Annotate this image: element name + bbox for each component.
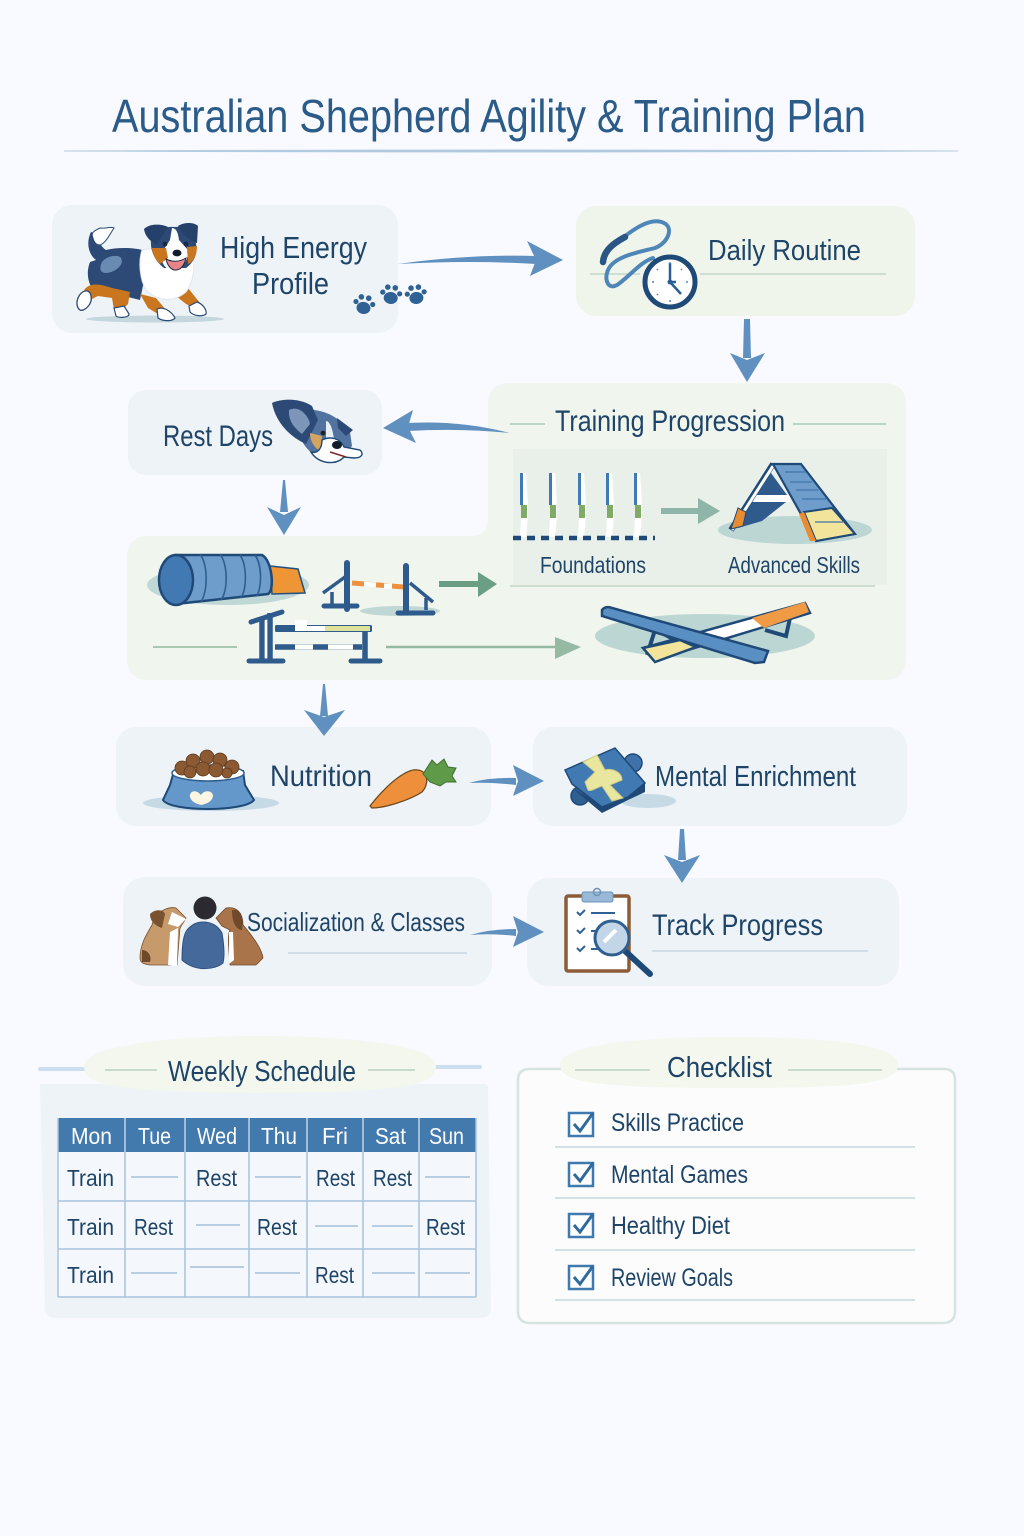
icon: food bowl <box>143 750 279 811</box>
heading: weekly schedule <box>84 1036 436 1093</box>
icon: carrot <box>370 759 456 808</box>
schedule table: Rest <box>316 1165 355 1191</box>
icon: seesaw <box>595 602 815 663</box>
checklist item: healthy diet: Healthy Diet <box>611 1212 730 1240</box>
schedule table: Train <box>67 1214 114 1240</box>
schedule table: Rest <box>373 1165 412 1191</box>
icon: puzzle pieces <box>565 748 645 813</box>
heading: checklist: Checklist <box>667 1052 772 1084</box>
panel: rest days <box>128 390 382 475</box>
icon: person with two dogs <box>140 896 263 969</box>
arrow: training progression to rest days <box>383 410 510 443</box>
panel: high energy profile <box>52 205 428 333</box>
panel: training progression <box>127 383 906 680</box>
arrow: foundations to advanced skills <box>661 498 720 524</box>
label: foundations: Foundations <box>540 552 646 578</box>
arrow: high energy to daily routine <box>398 241 563 276</box>
heading: mental enrichment: Mental Enrichment <box>655 761 856 793</box>
icon: a-frame <box>718 464 872 544</box>
schedule table: Rest <box>196 1165 238 1191</box>
heading: track progress: Track Progress <box>652 909 823 942</box>
icon: running dog <box>77 223 224 322</box>
schedule table: Sat <box>375 1123 407 1149</box>
divider line: left of panel jump <box>153 646 237 648</box>
heading: training progression: Training Progression <box>555 405 785 438</box>
schedule table: Rest <box>315 1262 354 1288</box>
schedule table: Mon <box>71 1123 112 1149</box>
dog legs <box>84 284 130 310</box>
heading: high energy profile: Profile <box>252 266 329 301</box>
icon: weave poles <box>513 473 655 538</box>
checklist item: review goals <box>555 1264 915 1300</box>
label: advanced skills: Advanced Skills <box>728 552 860 578</box>
checklist item: skills practice <box>555 1109 915 1147</box>
arrow: panel jump to seesaw <box>386 637 581 659</box>
schedule table: Fri <box>322 1123 348 1149</box>
arrow: socialization to track progress <box>470 916 544 947</box>
icon: paw prints <box>352 283 428 316</box>
schedule table: Rest <box>134 1214 173 1240</box>
heading: socialization and classes: Socialization & Classes <box>247 907 465 937</box>
schedule table: Sun <box>429 1123 464 1149</box>
schedule table: Rest <box>426 1214 465 1240</box>
arrow: nutrition to mental enrichment <box>469 765 544 796</box>
arrow: agility to nutrition <box>304 684 345 736</box>
heading: weekly schedule: Weekly Schedule <box>168 1056 356 1088</box>
checklist item: mental games: Mental Games <box>611 1161 748 1189</box>
arrow: mental enrichment to track progress <box>664 829 700 883</box>
schedule table: Train <box>67 1262 114 1288</box>
icon: panel jump <box>249 612 380 661</box>
icon: bar jump <box>323 563 440 616</box>
heading: high energy profile <box>220 230 367 301</box>
schedule table: Thu <box>261 1123 297 1149</box>
panel: weekly schedule <box>40 1036 491 1318</box>
panel: checklist <box>518 1037 955 1323</box>
icon: tunnel <box>147 554 309 605</box>
schedule table: Train <box>67 1165 114 1191</box>
checklist item: skills practice: Skills Practice <box>611 1109 744 1137</box>
icon: clipboard and magnifier <box>566 888 650 974</box>
panel: mental enrichment <box>533 727 907 826</box>
heading: nutrition: Nutrition <box>270 760 372 793</box>
arrow: daily routine to training progression <box>730 319 765 382</box>
panel: nutrition <box>116 727 491 826</box>
checklist item: healthy diet <box>555 1212 915 1250</box>
heading: rest days: Rest Days <box>163 420 273 453</box>
schedule table: Rest <box>257 1214 298 1240</box>
title: Australian Shepherd Agility & Training Plan <box>112 90 866 142</box>
arrow: jump to foundations <box>439 572 497 597</box>
checklist item: review goals: Review Goals <box>611 1264 733 1292</box>
heading: daily routine: Daily Routine <box>708 235 861 267</box>
checklist item: mental games <box>555 1161 915 1198</box>
heading: high energy profile: High Energy <box>220 230 367 265</box>
panel: daily routine <box>576 206 915 316</box>
panel: socialization and classes <box>123 877 492 986</box>
schedule table: Tue <box>138 1123 171 1149</box>
panel: track progress <box>527 878 899 986</box>
icon: resting dog <box>272 400 362 463</box>
icon: leash and clock <box>603 221 695 307</box>
heading: checklist <box>560 1037 898 1088</box>
schedule table <box>58 1118 476 1297</box>
arrow: rest days to agility <box>267 480 301 535</box>
schedule table: Wed <box>197 1123 237 1149</box>
